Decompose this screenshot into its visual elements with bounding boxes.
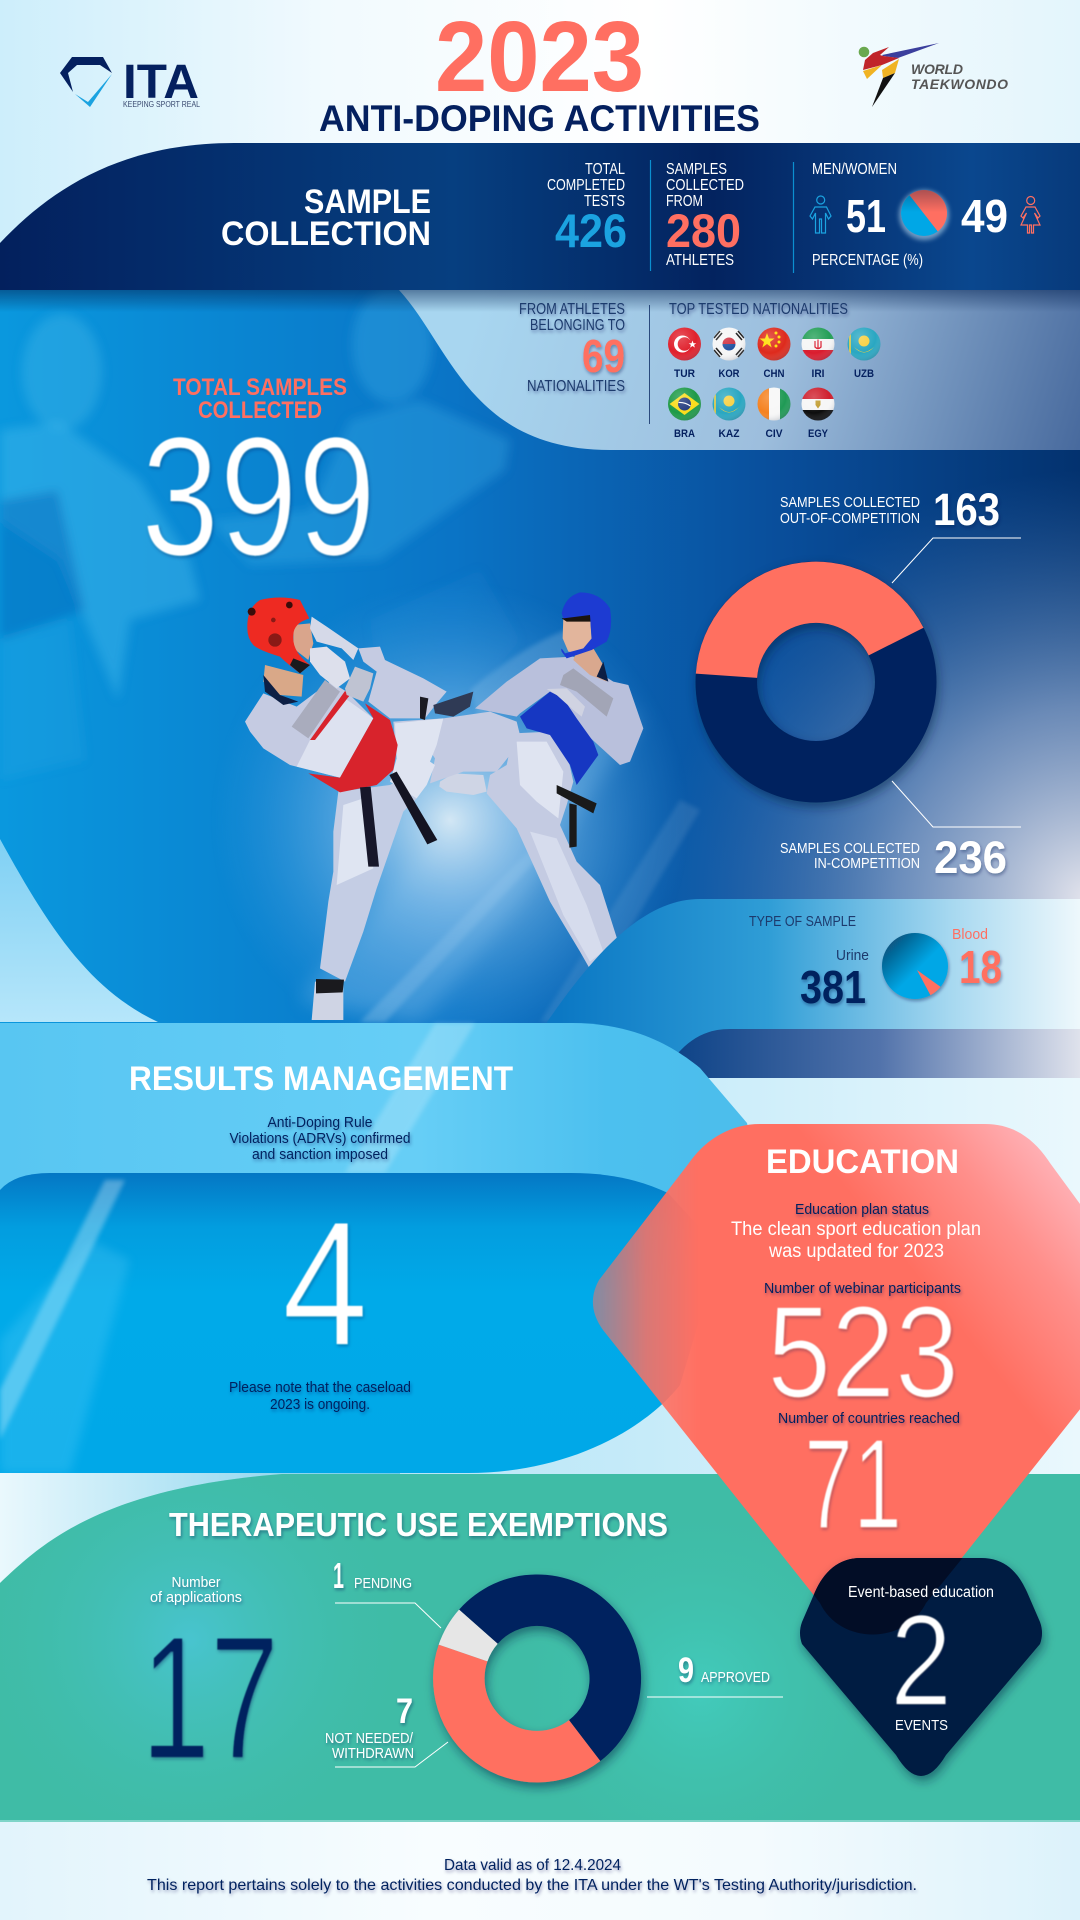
label: not needed withdrawn <box>325 1692 448 1767</box>
stat: men women percentage: 51 <box>846 190 886 242</box>
section heading: COLLECTION <box>221 215 431 253</box>
leader: out-of-competition <box>892 538 1021 583</box>
type of sample heading: TYPE OF SAMPLE <box>749 914 856 930</box>
panel: therapeutic use exemptions <box>0 1474 1080 1820</box>
number of applications: Number <box>172 1574 220 1591</box>
from athletes text: 69 <box>582 330 625 382</box>
TUE heading: THERAPEUTIC USE EXEMPTIONS <box>169 1506 668 1543</box>
stat: total completed tests: COMPLETED <box>547 177 625 194</box>
icon: woman <box>1021 196 1040 233</box>
logo: World Taekwondo <box>859 43 1008 107</box>
total samples collected: TOTAL SAMPLES <box>173 374 347 401</box>
from athletes text <box>519 301 625 395</box>
label: not needed withdrawn: WITHDRAWN <box>332 1746 414 1762</box>
panel: type of sample <box>547 899 1080 1078</box>
TUE content <box>141 1506 783 1796</box>
stat: samples collected from athletes: SAMPLES <box>666 161 727 178</box>
panel: event-based education <box>796 1556 1050 1787</box>
from athletes text: FROM ATHLETES <box>519 301 625 318</box>
report disclaimer: This report pertains solely to the activities conducted by the ITA under the WT's Testing Authority/jurisdiction. <box>147 1877 917 1894</box>
stat: total completed tests: 426 <box>555 204 627 257</box>
ghost athletes <box>0 287 520 780</box>
flag: CHN <box>757 327 791 380</box>
flag: TUR <box>668 327 702 380</box>
flag: UZB: UZB <box>854 368 874 380</box>
number of applications <box>141 1574 279 1796</box>
panel: results management <box>0 1023 760 1473</box>
title: 2023: 2023 <box>435 1 644 113</box>
label: blood: 18 <box>959 941 1002 993</box>
logo: ITA <box>60 56 200 109</box>
ADRV description: and sanction imposed <box>252 1146 388 1163</box>
stat: samples collected from athletes: 280 <box>666 204 741 257</box>
donut chart: samples by competition <box>696 484 1021 883</box>
top tested heading: TOP TESTED NATIONALITIES <box>669 301 848 318</box>
education plan status: The clean sport education plan <box>731 1219 981 1240</box>
big number: 4: 4 <box>282 1184 368 1383</box>
stat: total completed tests: TOTAL <box>585 161 625 178</box>
section heading <box>221 183 431 253</box>
label: pending: PENDING <box>354 1576 412 1592</box>
flag: BRA <box>668 387 702 440</box>
flag: TUR: TUR <box>674 368 695 380</box>
icon: man <box>810 196 831 233</box>
webinar participants: Number of webinar participants <box>764 1280 961 1297</box>
stat: samples collected from athletes: COLLECTED <box>666 177 744 194</box>
education plan status: was updated for 2023 <box>768 1241 944 1262</box>
total samples collected: COLLECTED <box>198 397 322 424</box>
stat: men women percentage: MEN/WOMEN <box>812 161 897 178</box>
education plan status <box>731 1201 981 1262</box>
donut ring <box>696 562 924 772</box>
label: out-of-competition: SAMPLES COLLECTED <box>780 495 920 511</box>
stat: total completed tests <box>547 161 627 257</box>
flags <box>668 327 881 440</box>
number of applications: of applications <box>150 1589 242 1606</box>
label: in-competition: SAMPLES COLLECTED <box>780 841 920 857</box>
flag: KOR: KOR <box>718 368 740 380</box>
label: out-of-competition <box>780 484 1000 535</box>
pie: men women <box>896 187 952 243</box>
flag: EGY: EGY <box>808 428 829 440</box>
flag: CIV <box>757 387 791 440</box>
athlete: blue <box>475 592 657 1002</box>
label: blood: Blood <box>952 926 988 943</box>
label: pending: 1 <box>333 1555 344 1596</box>
label: not needed withdrawn: 7 <box>396 1692 413 1731</box>
flag: KAZ <box>712 387 746 440</box>
label: out-of-competition: OUT-OF-COMPETITION <box>780 511 920 527</box>
logo: World Taekwondo: TAEKWONDO <box>911 76 1008 92</box>
label: approved <box>647 1651 783 1697</box>
panel: education <box>593 1124 1080 1634</box>
total samples collected: 399 <box>141 402 376 592</box>
subtitle: ANTI-DOPING ACTIVITIES <box>319 98 760 139</box>
flag: CHN: CHN <box>764 368 785 380</box>
logo: ITA: KEEPING SPORT REAL <box>123 100 200 109</box>
stat: men women percentage: 49 <box>961 190 1008 242</box>
label: not needed withdrawn: NOT NEEDED/ <box>325 1731 414 1747</box>
label: in-competition <box>780 832 1007 883</box>
flag: IRI <box>801 327 835 380</box>
events label: EVENTS <box>895 1717 948 1734</box>
label: in-competition: 236 <box>934 832 1007 883</box>
logo: World Taekwondo: WORLD <box>911 61 963 77</box>
stat: men women percentage: PERCENTAGE (%) <box>812 252 923 269</box>
countries reached: 71 <box>804 1413 902 1556</box>
flag: EGY <box>801 387 835 440</box>
data valid note: Data valid as of 12.4.2024 <box>444 1857 621 1874</box>
event text: Event-based education <box>848 1584 994 1601</box>
flag: UZB <box>847 327 881 380</box>
footer <box>0 1820 1080 1920</box>
ADRV description: Anti-Doping Rule <box>268 1114 372 1131</box>
from athletes text: BELONGING TO <box>530 317 625 334</box>
stat: samples collected from athletes <box>666 161 744 269</box>
education plan status: Education plan status <box>795 1201 929 1218</box>
panel: pale left curve <box>0 839 158 1022</box>
stat: samples collected from athletes: FROM <box>666 193 703 210</box>
light rays <box>360 625 700 1022</box>
label: in-competition: IN-COMPETITION <box>814 856 920 872</box>
caseload note: Please note that the caseload <box>229 1379 411 1396</box>
label: urine: 381 <box>800 961 866 1013</box>
caseload note <box>229 1379 411 1413</box>
stat: samples collected from athletes: ATHLETES <box>666 252 734 269</box>
flag: IRI: IRI <box>812 368 824 380</box>
flag: KAZ: KAZ <box>718 428 740 440</box>
donut chart: TUE outcomes <box>433 1574 641 1782</box>
label: approved: 9 <box>678 1651 694 1690</box>
stat: men women percentage <box>810 161 1040 269</box>
caseload note: 2023 is ongoing. <box>270 1396 370 1413</box>
athlete: red <box>245 597 520 1020</box>
ADRV description: Violations (ADRVs) confirmed <box>230 1130 410 1147</box>
webinar participants: 523 <box>767 1278 959 1425</box>
education heading: EDUCATION <box>766 1143 959 1181</box>
label: out-of-competition: 163 <box>933 484 1000 535</box>
ADRV description <box>230 1114 410 1163</box>
flag: BRA: BRA <box>674 428 695 440</box>
number of applications: 17 <box>141 1601 279 1796</box>
label: approved: APPROVED <box>701 1670 770 1686</box>
from athletes text: NATIONALITIES <box>527 378 625 395</box>
flag: KOR <box>712 327 746 380</box>
section heading: SAMPLE <box>304 183 431 221</box>
big number: 2: 2 <box>890 1587 952 1733</box>
leader: in-competition <box>892 781 1021 827</box>
label: blood <box>952 926 1002 993</box>
panel: nationalities <box>0 290 1080 450</box>
illustration: taekwondo athletes <box>245 592 657 1020</box>
flag: CIV: CIV <box>766 428 783 440</box>
label: pending <box>333 1555 441 1628</box>
results heading: RESULTS MANAGEMENT <box>129 1060 513 1098</box>
hero background <box>0 287 1080 1078</box>
logo: ITA: ITA <box>123 56 199 109</box>
stat: total completed tests: TESTS <box>584 193 625 210</box>
header <box>60 1 1008 139</box>
countries reached: Number of countries reached <box>778 1410 960 1427</box>
pie: sample type <box>882 933 948 1000</box>
label: urine: Urine <box>836 947 869 964</box>
panel: sample collection band <box>0 143 1080 290</box>
